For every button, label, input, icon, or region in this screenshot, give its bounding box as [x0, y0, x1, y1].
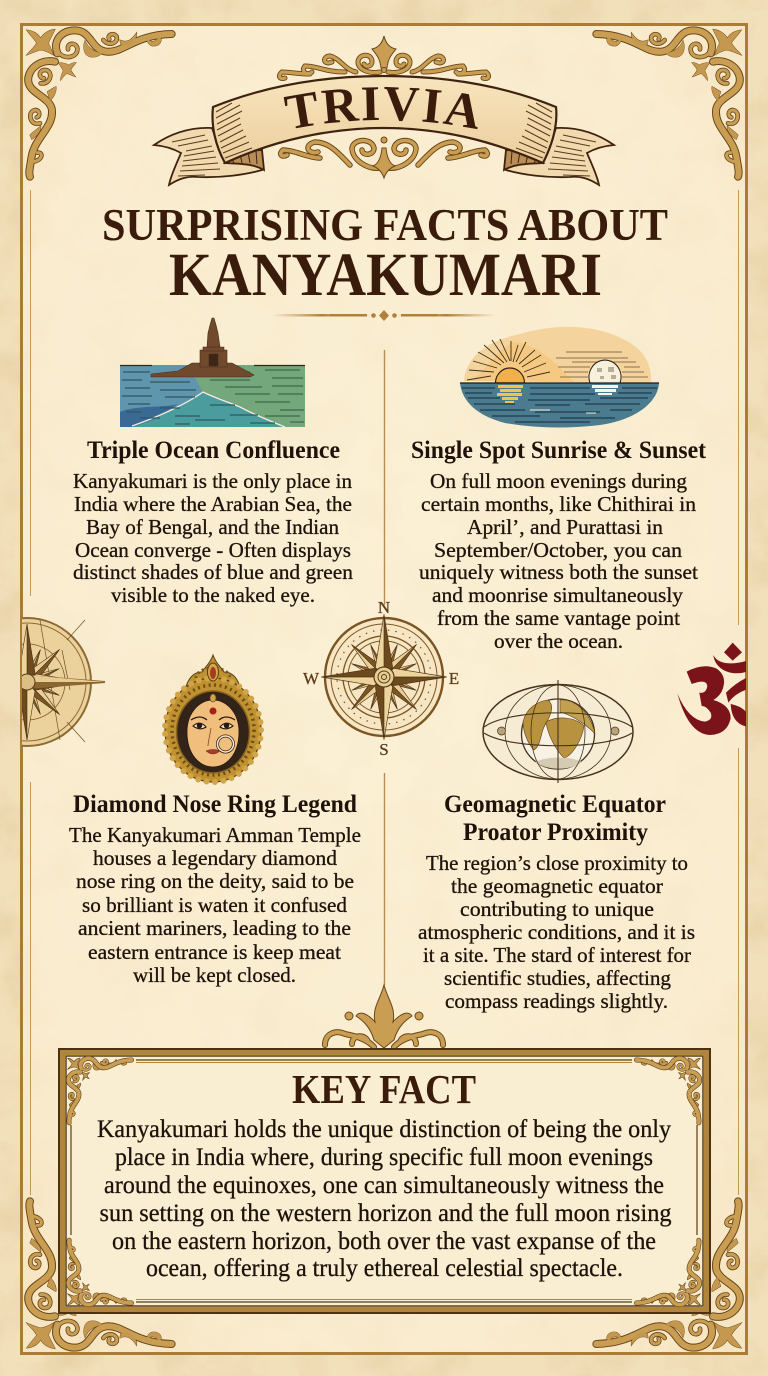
ribbon band	[212, 76, 556, 163]
fact 1 body: visible to the naked eye.	[111, 583, 315, 607]
fact 2 body: September/October, you can	[434, 538, 683, 562]
fact 2: single spot sunrise and sunset	[411, 435, 706, 653]
fact 3 body: will be kept closed.	[133, 963, 296, 987]
corner ornament top right	[596, 29, 741, 177]
compass direction letters: E	[449, 669, 459, 688]
moon	[589, 360, 621, 383]
fact 2 body: from the same vantage point	[437, 606, 680, 630]
main heading: KANYAKUMARI	[169, 242, 602, 309]
ribbon tails	[154, 128, 614, 185]
sea	[460, 383, 659, 427]
key fact inner rules	[71, 1060, 697, 1302]
fact 3 body: eastern entrance is keep meat	[88, 940, 341, 964]
fact 3: diamond nose ring legend	[69, 789, 361, 987]
fact 3 heading: Diamond Nose Ring Legend	[73, 789, 357, 818]
left edge compass, cropped by frame	[22, 617, 105, 747]
frame inner side rules	[30, 190, 738, 1195]
fact 2 body: and moonrise simultaneously	[432, 583, 684, 607]
fact 1 body: Ocean converge - Often displays	[75, 538, 351, 562]
fact 3 body: houses a legendary diamond	[93, 846, 337, 870]
fact 4: geomagnetic equator proximity	[418, 789, 695, 1013]
fact 4 body: it a site. The stard of interest for	[423, 943, 691, 967]
key fact body: place in India where, during specific full moon evenings	[115, 1144, 653, 1171]
memorial tower and island	[151, 318, 254, 377]
compass direction letters: N	[378, 598, 390, 617]
compass direction letters: W	[303, 669, 320, 688]
title divider	[272, 310, 496, 321]
fact 4 body: the geomagnetic equator	[451, 874, 663, 898]
key fact body	[97, 1116, 672, 1282]
compass direction letters	[303, 598, 459, 759]
key fact body: ocean, offering a truly ethereal celestial spectacle.	[146, 1255, 623, 1282]
banner: trivia	[152, 36, 616, 187]
fact 3 body: nose ring on the deity, said to be	[76, 869, 354, 893]
fact 4 heading: Geomagnetic Equator	[444, 789, 666, 818]
fact 2 body: uniquely witness both the sunset	[419, 560, 698, 584]
fact 4 heading	[444, 789, 666, 846]
fact 2 body: April’, and Purattasi in	[467, 515, 664, 539]
fact 3 body	[69, 823, 361, 987]
illustration: globe with meridians	[483, 680, 633, 783]
fact 1 body	[73, 469, 354, 607]
key fact heading: KEY FACT	[292, 1066, 476, 1112]
corner ornament bottom left	[27, 1201, 172, 1349]
fact 1 body: Bay of Bengal, and the Indian	[86, 515, 339, 539]
compass direction letters: S	[379, 740, 389, 759]
icon: om symbol, cropped by frame	[677, 643, 747, 735]
fact 4 body: contributing to unique	[460, 897, 654, 921]
center compass rose	[303, 598, 459, 759]
fact 1: triple ocean confluence	[73, 435, 354, 607]
key fact body: on the eastern horizon, both over the vast expanse of the	[112, 1228, 656, 1255]
ribbon hatching	[216, 103, 552, 158]
fact 4 heading: Proator Proximity	[463, 817, 648, 846]
key fact crest ornament	[325, 985, 443, 1048]
fact 1 heading: Triple Ocean Confluence	[87, 435, 340, 464]
illustration: ocean confluence with memorial	[120, 318, 305, 427]
center column divider	[384, 350, 386, 985]
fact 1 body: distinct shades of blue and green	[73, 560, 354, 584]
illustration: goddess with nose ring	[165, 655, 261, 782]
key fact body: sun setting on the western horizon and the full moon rising	[100, 1200, 672, 1227]
illustration: sunrise and moonrise	[460, 327, 659, 427]
key fact body: Kanyakumari holds the unique distinction of being the only	[97, 1116, 671, 1143]
fact 2 body: certain months, like Chithirai in	[421, 492, 697, 516]
fact 4 body: scientific studies, affecting	[444, 966, 671, 990]
banner title: TRIVIA	[284, 86, 478, 130]
fact 4 body: The region’s close proximity to	[426, 851, 688, 875]
moon haze	[556, 352, 648, 377]
main heading	[102, 200, 668, 309]
fact 3 body: so brilliant is waten it confused	[82, 893, 347, 917]
fact 2 heading: Single Spot Sunrise & Sunset	[411, 435, 706, 464]
main heading: SURPRISING FACTS ABOUT	[102, 200, 668, 250]
fact 4 body: compass readings slightly.	[445, 989, 668, 1013]
fact 2 body	[419, 469, 698, 653]
key fact corner ornaments	[68, 1058, 700, 1305]
fact 3 body: The Kanyakumari Amman Temple	[69, 823, 361, 847]
lower crest ornament	[281, 137, 487, 178]
fact 2 body: On full moon evenings during	[430, 469, 688, 493]
key fact body: around the equinoxes, one can simultaneously witness the	[104, 1172, 664, 1199]
corner ornament bottom right	[596, 1201, 741, 1349]
fact 1 body: Kanyakumari is the only place in	[73, 469, 352, 493]
fact 3 body: ancient mariners, leading to the	[78, 916, 351, 940]
top crest ornament	[279, 36, 489, 79]
sun	[496, 368, 524, 383]
corner ornament top left	[27, 29, 172, 177]
fact 4 body: atmospheric conditions, and it is	[418, 920, 695, 944]
fact 2 body: over the ocean.	[494, 629, 623, 653]
sun rays	[467, 339, 550, 380]
fact 4 body	[418, 851, 695, 1013]
key fact panel	[59, 1049, 710, 1313]
fact 1 body: India where the Arabian Sea, the	[74, 492, 352, 516]
